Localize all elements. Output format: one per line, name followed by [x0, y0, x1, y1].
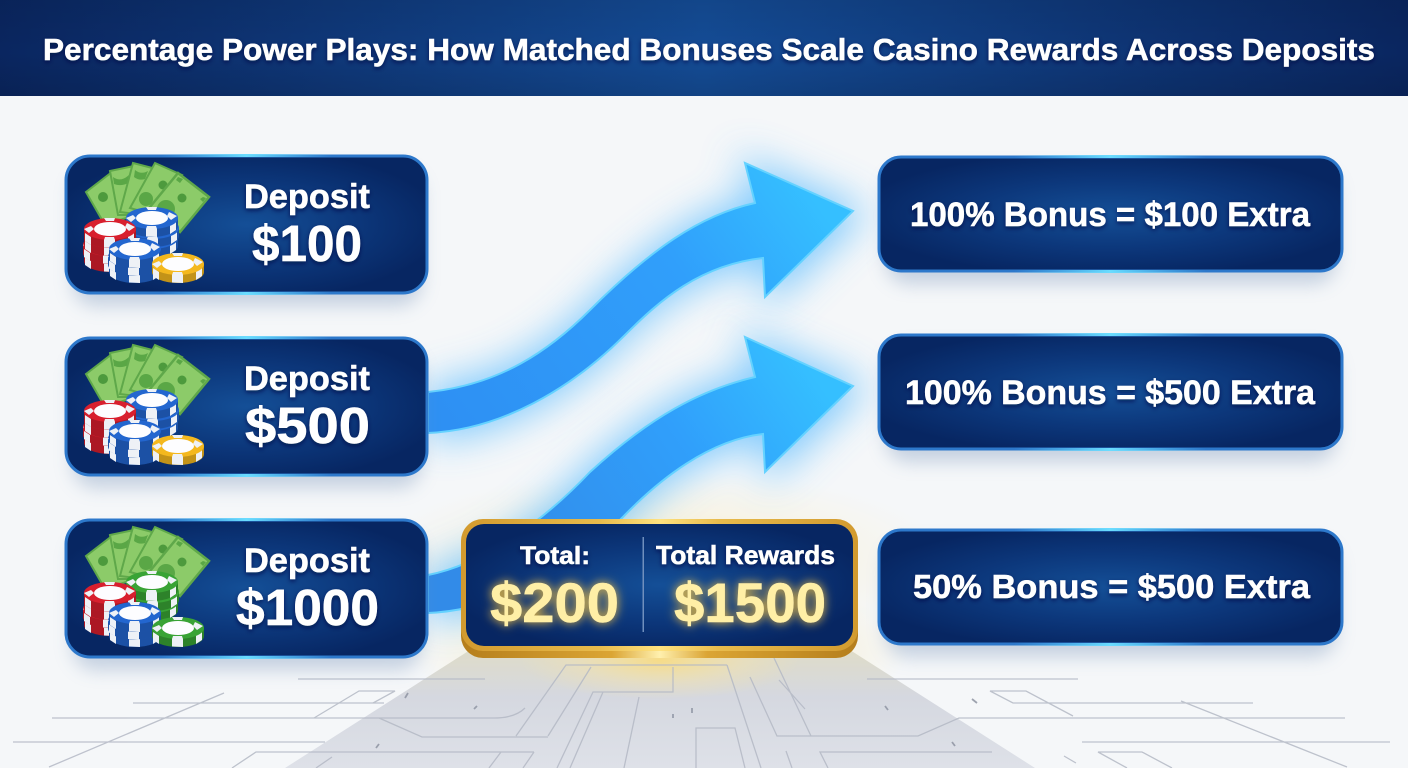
icon: cash and chips [83, 163, 209, 283]
amount: $100 [252, 215, 362, 272]
label: Deposit [244, 542, 370, 580]
panel: bonus 50 percent on 1000 [879, 528, 1342, 646]
panel: totals [461, 519, 858, 658]
panel: bonus 50 percent on 1000: 50% Bonus = $500 Extra [913, 568, 1311, 605]
panel: deposit 1000 [66, 518, 427, 659]
label: Deposit [244, 360, 370, 398]
icon: cash and chips [83, 527, 209, 647]
panel: bonus 100 percent on 100: 100% Bonus = $100 Extra [910, 196, 1311, 234]
total amount: $200 [490, 571, 619, 634]
divider [642, 537, 644, 632]
circuit lines [13, 658, 1390, 768]
floor trapezoid [285, 650, 1035, 768]
label: Deposit [244, 178, 370, 216]
panel: deposit 500 [66, 336, 427, 477]
title: Percentage Power Plays: How Matched Bonuses Scale Casino Rewards Across Deposits [43, 32, 1375, 67]
total heading: Total: [520, 542, 590, 570]
panel: bonus 100 percent on 500: 100% Bonus = $500 Extra [905, 374, 1316, 412]
panel: bonus 100 percent on 500 [879, 333, 1342, 451]
amount: $1000 [236, 579, 379, 636]
total rewards heading: Total Rewards [656, 540, 835, 570]
panel: bonus 100 percent on 100 [879, 155, 1342, 273]
arrow: deposit 1000 to 100 percent bonus [428, 327, 868, 620]
total rewards amount: $1500 [674, 571, 826, 634]
amount: $500 [245, 397, 370, 454]
floor glow under total box [410, 570, 910, 730]
header band [0, 0, 1408, 96]
gold glow behind total box [370, 470, 950, 650]
panel: deposit 100 [66, 154, 427, 295]
card shadows [72, 170, 1337, 670]
floor: perspective platform with circuit lines [13, 570, 1390, 768]
icon: cash and chips [83, 345, 209, 465]
arrow: deposit 500 to 100 percent bonus [428, 153, 868, 440]
